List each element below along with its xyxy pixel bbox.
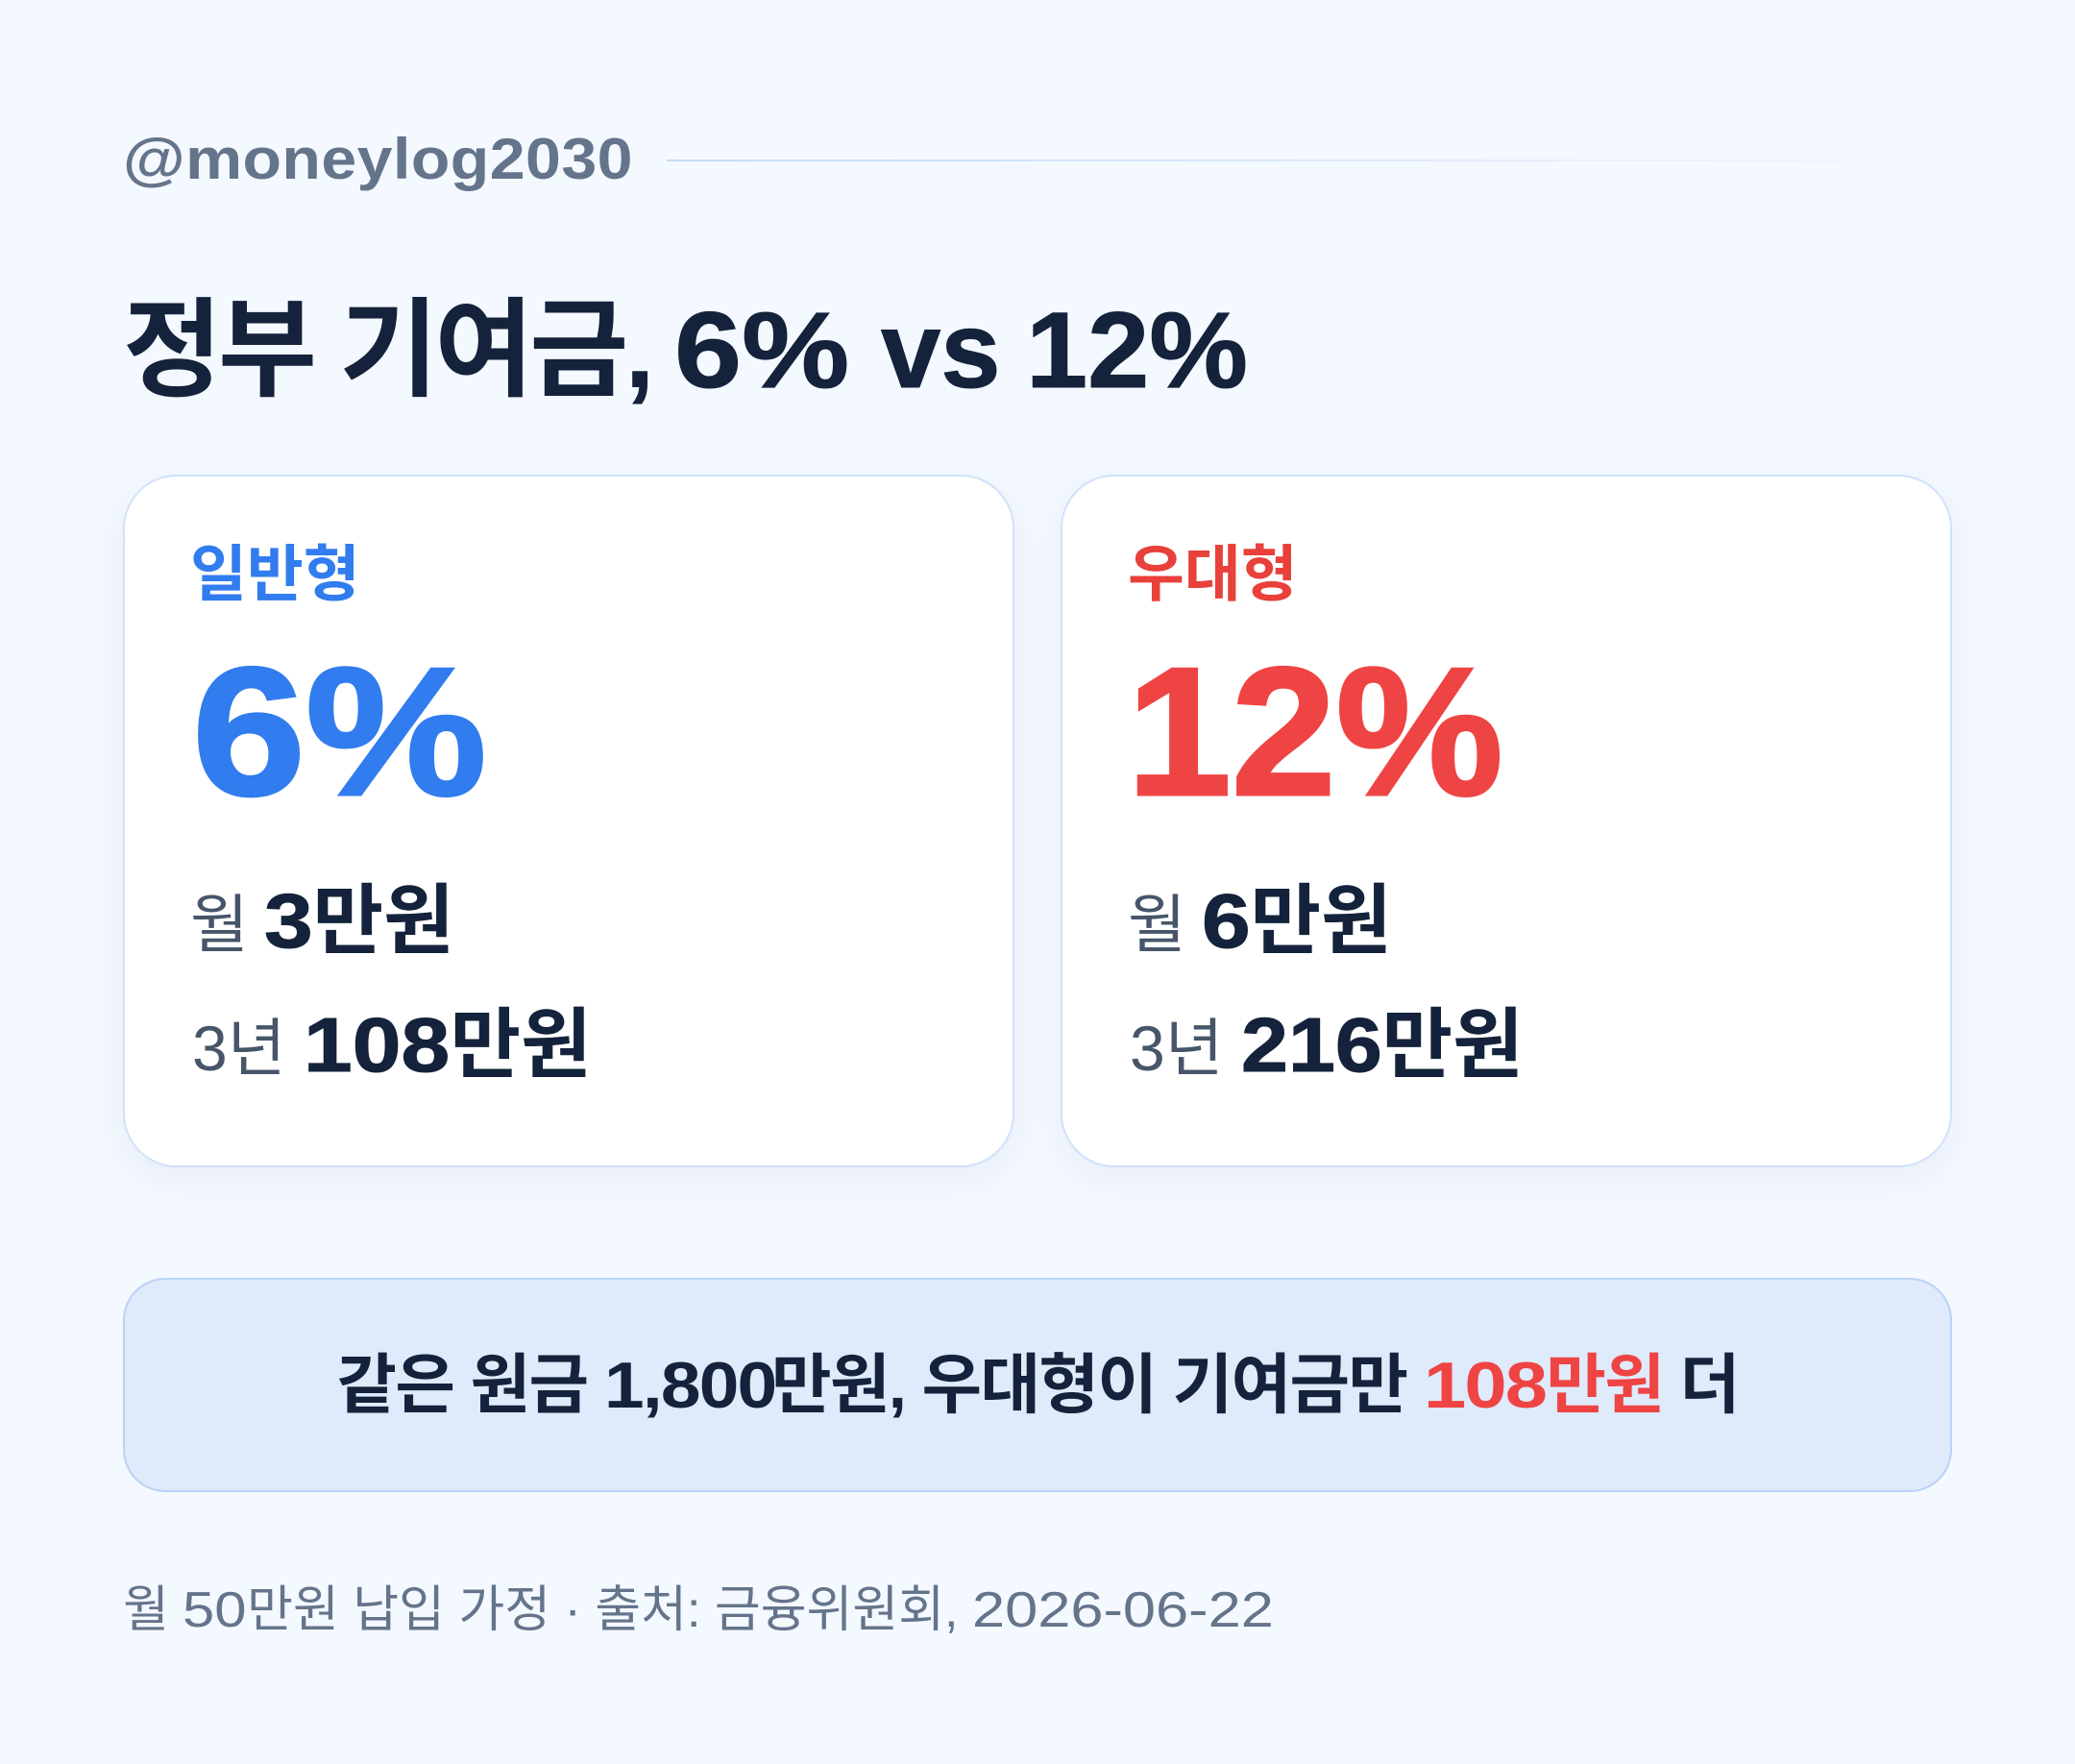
callout text: 108 [1424, 1349, 1546, 1422]
callout text: 1,800 [604, 1349, 775, 1422]
monthly amount: 월 [190, 889, 249, 960]
header divider [667, 159, 1952, 161]
monthly amount: 만원 [1251, 878, 1392, 964]
three-year total: 만원 [450, 1002, 592, 1088]
monthly amount [190, 878, 454, 964]
callout [123, 1278, 1952, 1492]
rate: 6%: 6% [192, 630, 487, 834]
footnote: 2026-06-22 [972, 1582, 1274, 1638]
title: vs [881, 290, 1001, 410]
footnote: 50 [183, 1582, 247, 1638]
panel: preferential type [1061, 475, 1952, 1167]
title: 12% [1026, 290, 1248, 410]
three-year total [1130, 1002, 1524, 1088]
three-year total: 3년 [1130, 1013, 1223, 1084]
three-year total: 3년 [192, 1013, 285, 1084]
three-year total: 108 [304, 1002, 450, 1088]
title: 6% [674, 290, 849, 410]
three-year total: 216 [1241, 1002, 1382, 1088]
label: preferential type: 우대형 [1128, 540, 1298, 609]
monthly amount: 3 [264, 878, 313, 964]
monthly amount: 6 [1202, 878, 1251, 964]
three-year total [192, 1002, 592, 1088]
three-year total: 만원 [1381, 1002, 1524, 1088]
title [123, 290, 1248, 410]
monthly amount: 만원 [313, 878, 454, 964]
monthly amount: 월 [1128, 889, 1186, 960]
panel: general type [123, 475, 1014, 1167]
callout text: 같은 원금 만원, 우대형이 기여금만 만원 더 [336, 1349, 1739, 1422]
rate: 12%: 12% [1127, 630, 1503, 834]
label: general type: 일반형 [190, 540, 360, 609]
brand handle: @moneylog2030 [123, 127, 633, 191]
title: 정부 기여금, [123, 290, 650, 410]
footnote: 월 만원 납입 가정 · 출처: 금융위원회, [123, 1582, 959, 1638]
monthly amount [1128, 878, 1392, 964]
